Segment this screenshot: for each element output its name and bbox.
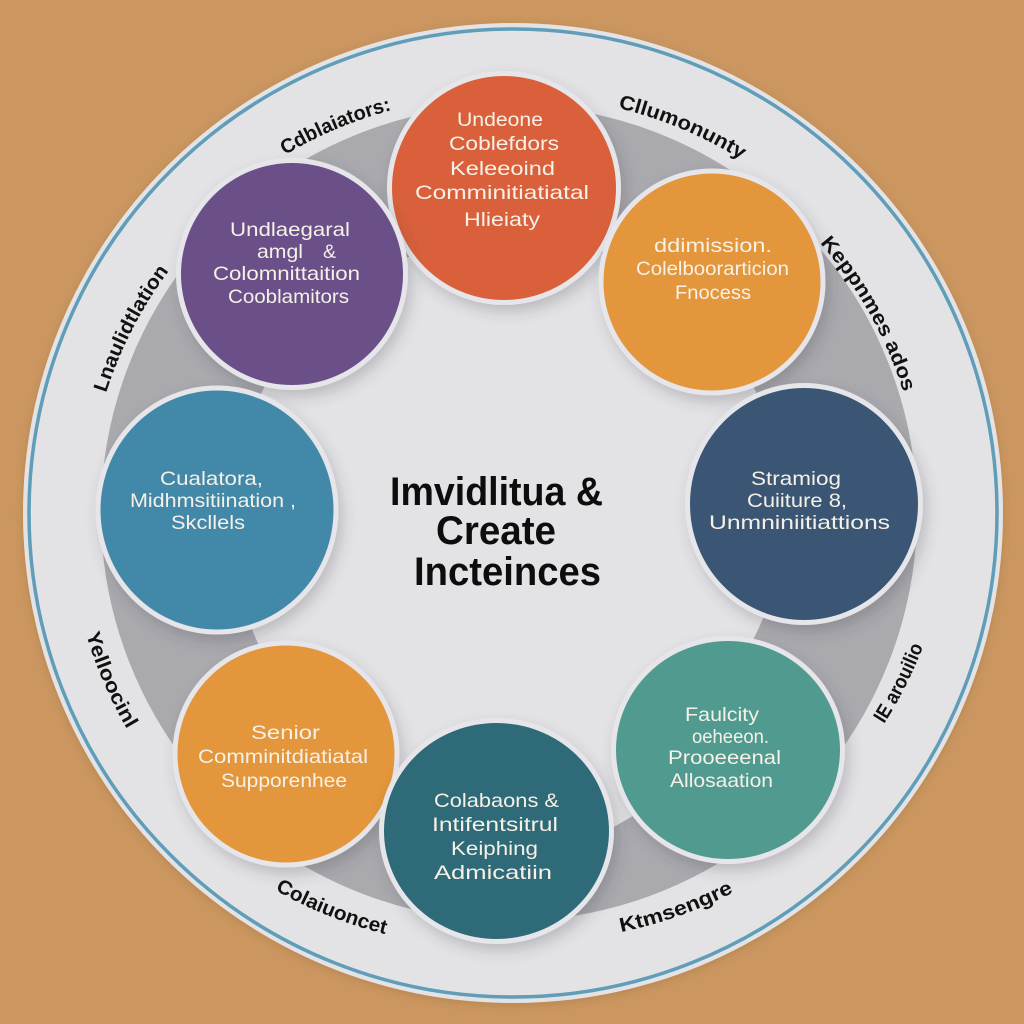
node: red top: Undeone	[457, 109, 543, 131]
grey connecting band	[168, 172, 850, 854]
centre title: Imvidlitua &	[390, 470, 603, 514]
centre title	[390, 470, 603, 594]
node: red top: Hlieiaty	[464, 209, 540, 231]
node: orange upper right: ddimission.	[654, 235, 772, 257]
node: red top: Comminitiatiatal	[415, 182, 589, 204]
curved label: top left: Cdblaiators:	[281, 100, 390, 152]
node: red top	[390, 74, 618, 302]
node: purple: Cooblamitors	[228, 286, 349, 308]
node: purple: Undlaegaral	[230, 219, 350, 241]
node: navy right: Unmniniitiattions	[709, 512, 890, 534]
node: orange lower left: Supporenhee	[221, 770, 347, 792]
node: dark teal bottom: Intifentsitrul	[432, 814, 558, 836]
node: red top: Keleeoind	[450, 158, 555, 180]
node: green lower right	[614, 638, 842, 862]
node: green lower right: Faulcity	[685, 704, 759, 726]
node: orange lower left: Comminitdiatiatal	[198, 746, 368, 768]
node: blue left: Skcllels	[171, 512, 245, 534]
node: purple: &	[323, 241, 336, 263]
node: dark teal bottom: Admicatiin	[434, 862, 552, 884]
node: blue left: Midhmsitiination ,	[130, 490, 296, 512]
node: navy right: Stramiog	[751, 468, 841, 490]
curved label: bottom left: Colaiuoncet	[278, 880, 388, 934]
node: green lower right: Prooeeenal	[668, 747, 781, 769]
node: purple: amgl	[257, 241, 303, 263]
centre title: Incteinces	[414, 550, 601, 594]
node: orange upper right: Colelboorarticion	[636, 258, 789, 280]
curved label: right upper: Keppnmes ados	[821, 235, 912, 390]
curved label: top right: Cllumonunty	[620, 96, 746, 159]
curved label: right lower: IE arouilio	[873, 644, 922, 723]
node: orange upper right	[601, 171, 823, 393]
node: purple	[178, 160, 406, 388]
node: navy right: Cuiiture 8,	[747, 490, 847, 512]
node: green lower right: oeheeon.	[692, 726, 769, 748]
curved label: left upper: Lnaulidtlation	[94, 267, 168, 392]
node: blue left: Cualatora,	[160, 468, 263, 490]
node: orange lower left	[175, 643, 397, 865]
node: blue left	[98, 388, 336, 632]
node: dark teal bottom: Keiphing	[451, 838, 538, 860]
node: orange upper right: Fnocess	[675, 282, 751, 304]
curved label: left lower: Yelloocinl	[88, 630, 139, 728]
node: dark teal bottom: Colabaons &	[434, 790, 559, 812]
node: green lower right: Allosaation	[670, 770, 773, 792]
node: red top: Coblefdors	[449, 133, 559, 155]
node: navy right	[688, 386, 920, 622]
node: dark teal bottom	[382, 720, 612, 942]
curved label: bottom right: Ktmsengre	[620, 884, 732, 932]
node: orange lower left: Senior	[251, 722, 321, 744]
centre title: Create	[436, 509, 556, 553]
node: purple: Colomnittaition	[213, 263, 360, 285]
inner light field	[233, 238, 784, 828]
